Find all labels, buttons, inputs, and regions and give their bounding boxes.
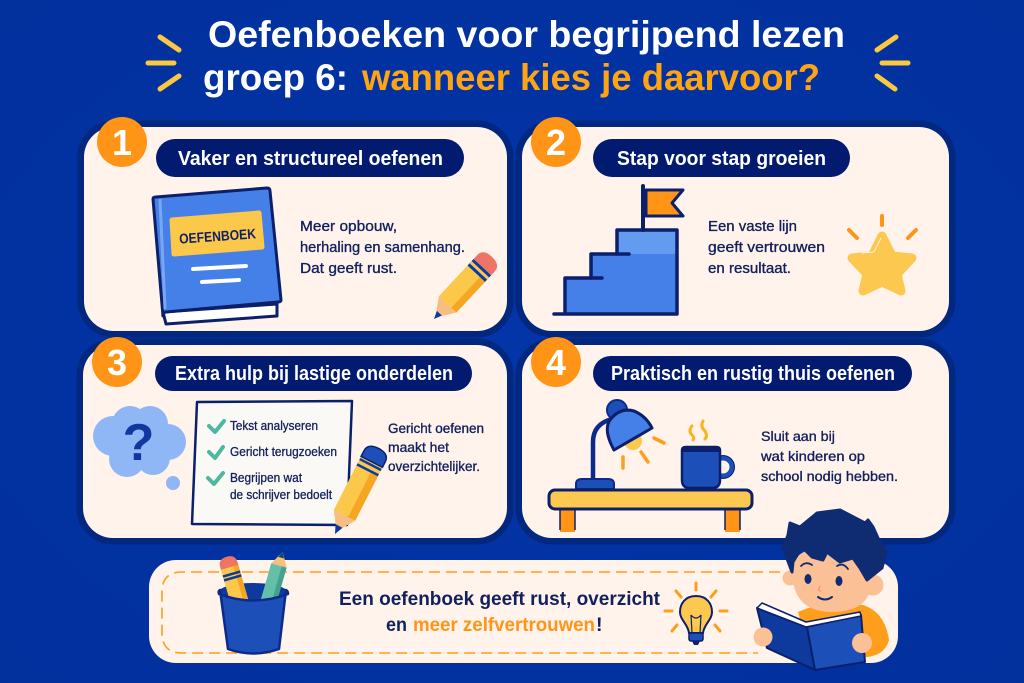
number badge 2: 2 [546, 122, 566, 163]
heading pill 1 [156, 139, 464, 177]
icon: coffee mug with steam [682, 421, 734, 488]
icon: light bulb [665, 583, 727, 645]
icon: desk lamp [576, 400, 664, 489]
body text 2: en resultaat. [708, 260, 791, 277]
title: wanneer kies je daarvoor? [361, 57, 820, 98]
banner text: meer zelfvertrouwen [413, 614, 595, 636]
heading pill 4 [593, 356, 912, 391]
number badge 2 [531, 117, 581, 167]
banner text: Een oefenboek geeft rust, overzicht [339, 588, 660, 610]
body text 3: maakt het [388, 439, 449, 455]
checklist labels [230, 419, 337, 502]
body text 4 [760, 428, 898, 484]
checklist labels: Gericht terugzoeken [230, 445, 337, 459]
banner text [339, 588, 660, 636]
title: groep 6: [203, 57, 348, 98]
heading pill 2 [593, 139, 850, 177]
check items [208, 421, 224, 484]
heading pill 3 [155, 356, 472, 391]
body text 1: Dat geeft rust. [300, 260, 397, 277]
bottom banner [149, 510, 898, 670]
heading pill 3: Extra hulp bij lastige onderdelen [175, 363, 453, 385]
body text 4: school nodig hebben. [761, 468, 898, 484]
number badge 3 [92, 337, 142, 387]
body text 3: overzichtelijker. [388, 458, 480, 474]
banner text: ! [596, 614, 602, 636]
checklist [192, 401, 352, 525]
icon: oefenboek: OEFENBOEK [179, 225, 256, 247]
body text 2: geeft vertrouwen [708, 239, 825, 256]
icon: desk [549, 490, 752, 532]
number badge 1: 1 [112, 122, 132, 163]
number badge 3: 3 [107, 342, 127, 383]
body text 2 [708, 218, 825, 277]
heading pill 1: Vaker en structureel oefenen [178, 148, 443, 170]
panel 1: vaker en structureel oefenen [84, 117, 507, 331]
panel 2: stap voor stap groeien [522, 117, 949, 331]
panel 3: extra hulp bij lastige onderdelen [83, 337, 507, 539]
checklist labels: de schrijver bedoelt [230, 488, 332, 502]
number badge 1 [97, 117, 147, 167]
icon: pencil blue eraser [324, 443, 389, 539]
checklist labels: Tekst analyseren [230, 419, 318, 433]
icon: thought cloud with question mark [93, 406, 186, 490]
heading pill 4: Praktisch en rustig thuis oefenen [611, 363, 895, 385]
icon: pencil cup [218, 550, 290, 654]
illustration: boy reading a book [754, 510, 889, 670]
icon: left title sparkle [148, 37, 179, 89]
title: Oefenboeken voor begrijpend lezen [208, 14, 845, 55]
panel 4: praktisch en rustig thuis oefenen [522, 337, 949, 538]
icon: thought cloud with question mark: ? [123, 414, 154, 472]
banner text: en [386, 614, 407, 636]
title [203, 14, 845, 98]
body text 3 [388, 420, 484, 474]
heading pill 2: Stap voor stap groeien [617, 148, 826, 170]
body text 2: Een vaste lijn [708, 218, 797, 235]
icon: stairs with flag [554, 186, 683, 314]
icon: right title sparkle [877, 37, 908, 89]
body text 1: herhaling en samenhang. [300, 239, 465, 256]
body text 4: Sluit aan bij [761, 428, 835, 444]
number badge 4 [531, 337, 581, 387]
body text 1: Meer opbouw, [300, 218, 397, 235]
icon: star [849, 216, 916, 291]
body text 3: Gericht oefenen [388, 420, 484, 436]
body text 1 [300, 218, 465, 277]
checklist labels: Begrijpen wat [230, 471, 302, 485]
body text 4: wat kinderen op [760, 448, 865, 464]
icon: oefenboek [153, 188, 281, 324]
icon: pencil [425, 249, 501, 327]
number badge 4: 4 [546, 342, 566, 383]
